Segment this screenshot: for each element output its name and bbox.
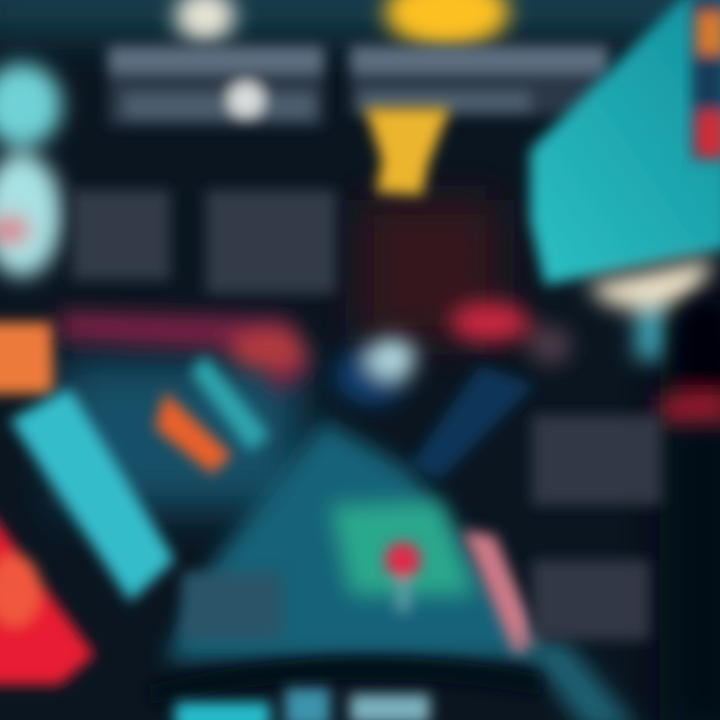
teal panel bbox=[530, 0, 720, 285]
top yellow bulb bbox=[385, 0, 509, 48]
pink diagonal bbox=[462, 530, 540, 655]
text block centre bbox=[206, 190, 336, 294]
map text block bbox=[182, 572, 282, 640]
orange diagonal bbox=[155, 392, 232, 474]
green map area bbox=[330, 500, 475, 595]
cream shape bbox=[585, 258, 715, 360]
left cyan icon bbox=[0, 63, 62, 277]
red map pin bbox=[385, 542, 421, 612]
text block left bbox=[72, 190, 170, 280]
purple red band bbox=[60, 312, 312, 395]
text block right lower bbox=[532, 560, 650, 640]
heading left bbox=[108, 46, 324, 126]
bottom cyan blobs bbox=[175, 688, 430, 720]
teal map triangle bbox=[165, 420, 550, 660]
red highlight bbox=[450, 302, 572, 365]
cyan diagonal strip bbox=[10, 388, 175, 602]
heading right bbox=[350, 46, 608, 116]
teal road bbox=[520, 640, 640, 720]
top white icon bbox=[175, 0, 235, 42]
cyan diagonal small bbox=[190, 355, 270, 452]
right top chart strip bbox=[692, 0, 720, 160]
blue diagonal bbox=[410, 365, 535, 480]
text block right upper bbox=[532, 415, 662, 505]
centre blue figure bbox=[336, 338, 416, 405]
red triangle bbox=[0, 505, 95, 685]
right dark figure bbox=[660, 295, 720, 423]
bottom dark arc bbox=[150, 657, 540, 705]
orange block bbox=[0, 322, 53, 394]
yellow cup icon bbox=[365, 108, 450, 195]
